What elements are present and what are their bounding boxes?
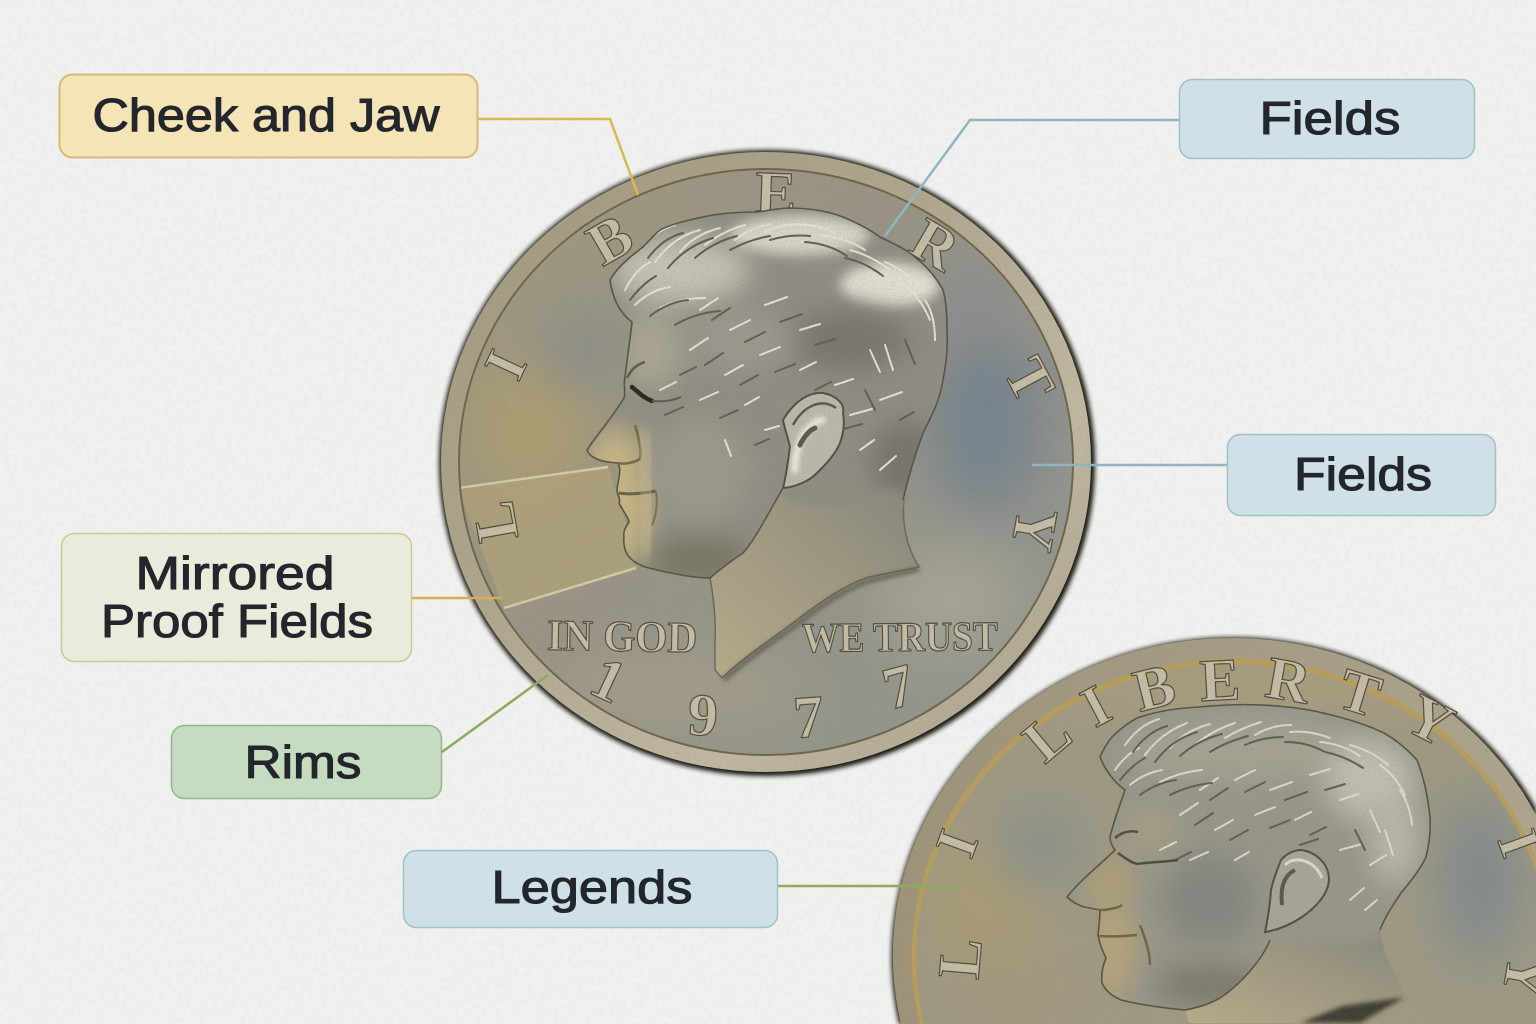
legend letters: L — [925, 935, 995, 981]
label: fields right: Fields — [1294, 448, 1432, 500]
ear — [1265, 850, 1329, 932]
label: legends: Legends — [492, 861, 692, 913]
head to neck blend — [783, 490, 903, 502]
connector: fields right — [1032, 464, 1227, 466]
legend letters: E — [1198, 646, 1242, 714]
head outline — [587, 208, 947, 578]
ear — [783, 393, 844, 488]
hair strands light — [625, 224, 935, 470]
inner gold line — [912, 658, 1536, 1024]
label: mirrored proof fields: Mirrored — [136, 547, 334, 599]
coin shadow — [439, 150, 1095, 776]
coin field with toning — [916, 665, 1536, 1024]
bust shadow — [1300, 997, 1405, 1023]
label: fields right — [1228, 434, 1496, 516]
coin shadow — [891, 637, 1536, 1024]
legend letters: L — [1011, 699, 1084, 775]
motto IN GOD WE TRUST: WE TRUST — [802, 614, 998, 662]
legend letters: I — [922, 822, 991, 865]
connector: legends — [778, 885, 958, 887]
inner rim line — [458, 168, 1074, 756]
label: cheek and jaw: Cheek and Jaw — [92, 89, 440, 141]
hair strands light — [1115, 719, 1412, 910]
neck and bust — [1185, 930, 1405, 1023]
legend letters E and R behind hair: E — [754, 159, 798, 229]
head outline — [1067, 705, 1430, 1010]
coin field with toning — [458, 170, 1072, 754]
brow and eye — [1115, 831, 1178, 864]
legend letters: Y — [1396, 681, 1464, 759]
legend letters E and R behind hair — [754, 159, 971, 284]
label: mirrored proof fields — [62, 534, 412, 662]
brow and eye — [627, 362, 681, 401]
legend letters: L — [459, 496, 531, 547]
coin rim — [893, 638, 1536, 1024]
mirrored proof wedge — [458, 467, 640, 608]
legend letters: T — [991, 346, 1068, 413]
legend letters: R — [1261, 644, 1316, 717]
coin rim — [441, 152, 1091, 772]
head base — [587, 208, 947, 578]
portrait — [1067, 705, 1430, 1023]
legend letters: Y — [998, 502, 1071, 557]
date 1977: 7 — [876, 651, 922, 722]
legend letters: I — [471, 341, 540, 389]
metal grain — [893, 638, 1536, 1024]
nose and mouth detail — [1099, 905, 1150, 965]
head to neck blend — [1270, 932, 1380, 942]
motto IN GOD WE TRUST — [547, 611, 998, 662]
label: legends — [404, 850, 778, 928]
legend letters: I — [1071, 672, 1121, 740]
connector: mirrored proof fields — [411, 597, 502, 599]
label: rims: Rims — [244, 736, 362, 788]
connector: fields top — [885, 120, 1179, 236]
label: fields top: Fields — [1260, 92, 1400, 144]
label: rims — [172, 726, 442, 798]
date 1977: 1 — [581, 644, 636, 716]
label: cheek and jaw — [60, 74, 478, 158]
label: fields top — [1180, 80, 1474, 158]
legend letters — [459, 201, 1071, 557]
connector: rims — [442, 675, 548, 752]
label: mirrored proof fields: Proof Fields — [101, 595, 373, 647]
second coin — [891, 637, 1536, 1024]
connector: cheek and jaw — [477, 119, 638, 195]
legend letters: B — [1127, 651, 1182, 724]
neck and bust — [710, 488, 919, 678]
legend letters E and R behind hair: R — [900, 205, 971, 284]
date 1977: 7 — [791, 683, 826, 751]
head shading — [1084, 719, 1420, 1005]
portrait — [579, 208, 947, 680]
head base — [1067, 705, 1430, 1010]
date 1977 — [581, 644, 922, 751]
bust shadow — [724, 569, 919, 680]
head shading — [579, 215, 940, 582]
legend letters: T — [1331, 655, 1389, 730]
mouth and nose detail — [618, 425, 657, 556]
date 1977: 9 — [686, 681, 720, 749]
hair strands dark — [1120, 726, 1365, 860]
main coin — [439, 150, 1095, 776]
legend letters — [922, 644, 1536, 1004]
metal grain — [441, 152, 1091, 772]
hair strands dark — [630, 233, 915, 445]
motto IN GOD WE TRUST: IN GOD — [547, 611, 698, 662]
legend letters: B — [576, 201, 644, 278]
